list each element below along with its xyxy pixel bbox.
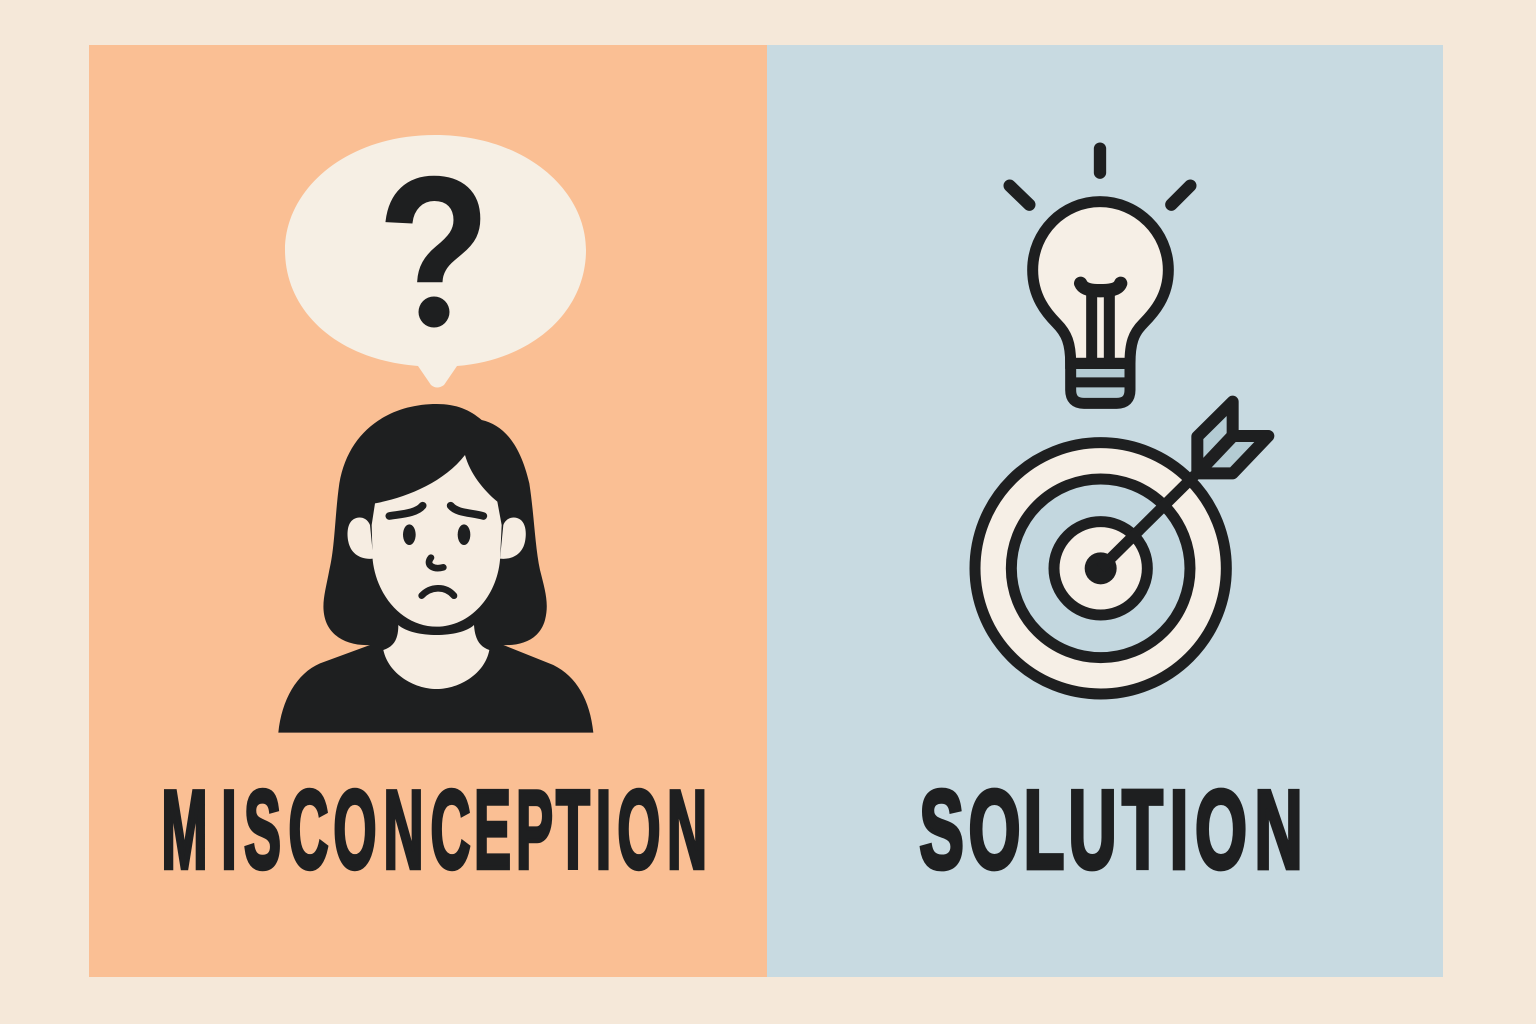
icon: speech bubble with question mark: ? [378,133,490,372]
panel: misconception [89,45,767,977]
panel: solution [767,45,1443,977]
icon: speech bubble with question mark [285,133,586,388]
icon: target with arrow [975,402,1268,694]
icon: worried woman [278,404,593,733]
icon: light bulb [1010,149,1190,403]
heading: solution: SOLUTION [919,769,1303,892]
heading: misconception: MISCONCEPTION [161,768,707,892]
